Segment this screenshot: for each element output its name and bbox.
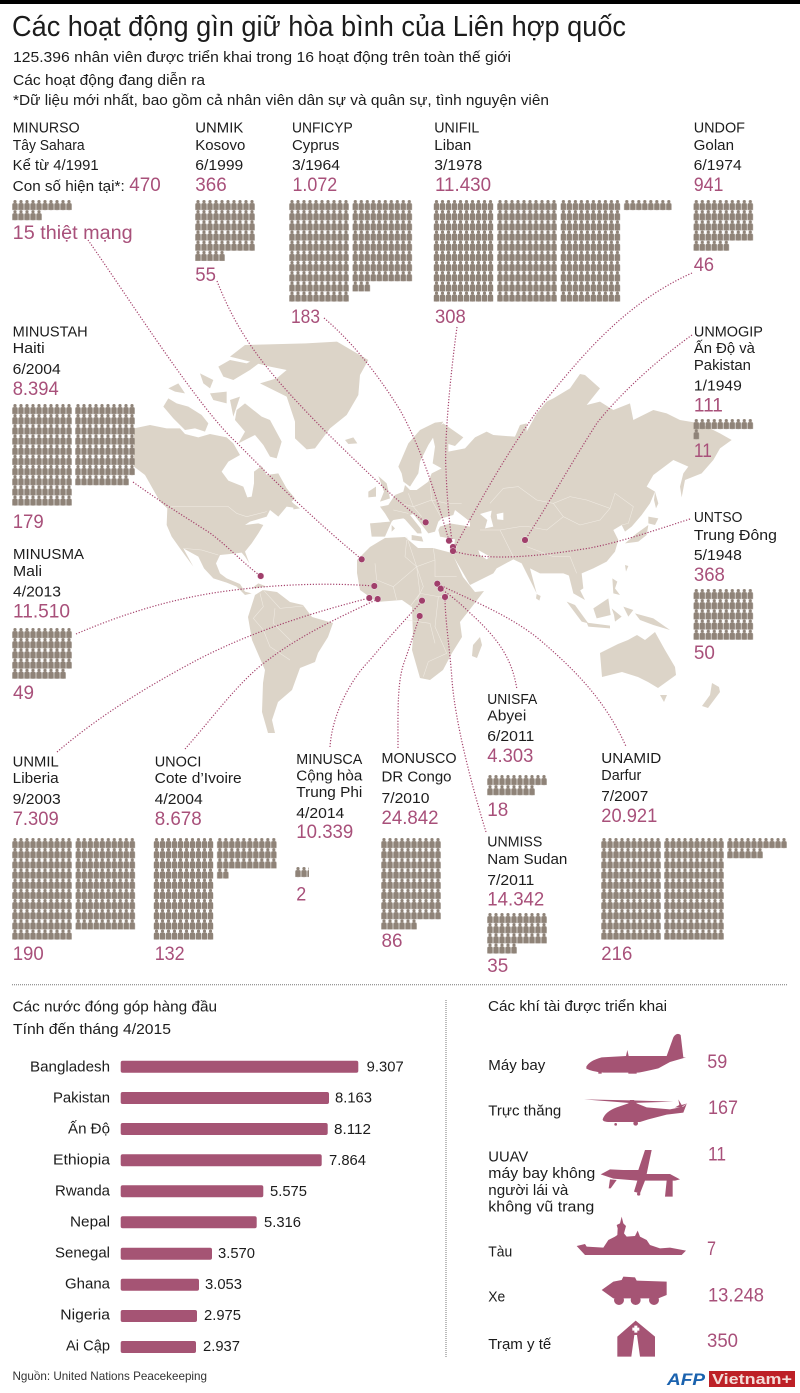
panel: MONUSCO: 7/2010 <box>382 791 430 807</box>
bar chart: 5.316 <box>264 1215 301 1231</box>
subtitle text block: 125.396 nhân viên được triển khai trong 16 hoạt động trên toàn thế giới <box>13 50 511 66</box>
panel: UNMIL: Liberia <box>13 771 60 787</box>
top black bar <box>0 0 800 4</box>
bar chart: 3.053 <box>205 1277 242 1293</box>
panel: UNTSO: 5/1948 <box>694 548 742 564</box>
panel: UNMIK: Kosovo <box>195 138 245 154</box>
source note: Nguồn: United Nations Peacekeeping <box>12 1369 207 1383</box>
panel: MINUSCA: Cộng hòa <box>296 769 363 785</box>
panel: MINUSMA: Mali <box>13 564 42 580</box>
connector lines from panels to map dots <box>57 240 692 832</box>
panel: UNOCI: Cote d’Ivoire <box>155 771 242 787</box>
panel: UNIFIL: 11.430 <box>435 175 491 196</box>
logo: Vietnam+: Vietnam+ <box>712 1371 792 1388</box>
panel: MINUSMA: MINUSMA <box>13 547 84 563</box>
panel: UNAMID: Darfur <box>601 768 641 784</box>
panel: UNOCI: UNOCI <box>155 755 201 771</box>
logo: AFP: AFP <box>666 1370 706 1389</box>
panel: UNIFIL: Liban <box>434 138 471 154</box>
panel: UNMIL: 190 <box>13 944 44 965</box>
heading: top contributors <box>12 1000 217 1038</box>
bar chart: 5.575 <box>270 1184 307 1200</box>
bar chart: 3.570 <box>218 1246 255 1262</box>
panel: UNMIL: 9/2003 <box>13 792 61 808</box>
icon: helicopter <box>584 1099 687 1126</box>
panel: MINURSO <box>12 121 161 244</box>
panel: UNTSO: UNTSO <box>694 510 742 526</box>
panel: MINUSTAH: 6/2004 <box>13 362 61 378</box>
panel: UNMISS: UNMISS <box>487 835 542 851</box>
panel: UNIFIL: UNIFIL <box>434 121 479 137</box>
panel: UNMOGIP <box>693 325 763 462</box>
bar chart: Bangladesh <box>30 1060 110 1076</box>
panel: UNOCI <box>154 755 277 965</box>
panel: UNMIK: 55 <box>195 265 216 286</box>
panel: UNAMID: 216 <box>601 944 632 965</box>
panel: MINUSMA: 49 <box>13 683 34 704</box>
icon: drone <box>601 1150 680 1197</box>
panel: UNMIK: 366 <box>195 175 227 196</box>
map location dots <box>257 519 528 619</box>
bar chart: Nigeria <box>60 1308 111 1324</box>
panel: UNMIK: UNMIK <box>195 121 244 137</box>
panel: UNFICYP: 1.072 <box>292 175 337 196</box>
panel: UNTSO: 50 <box>694 643 715 664</box>
bar chart: 2.937 <box>203 1339 240 1355</box>
panel: UNISFA: 18 <box>487 800 508 821</box>
panel: UNIFIL: 308 <box>435 307 466 328</box>
panel: UNOCI: 132 <box>155 944 185 965</box>
panel: UNMIK <box>195 121 255 286</box>
panel: UNTSO: 368 <box>694 565 725 586</box>
bar chart: 2.975 <box>204 1308 241 1324</box>
world map <box>134 342 732 733</box>
panel: MINUSCA: 10.339 <box>296 822 353 843</box>
map country borders <box>167 482 633 677</box>
panel: UNAMID: 7/2007 <box>601 789 648 805</box>
equipment counts: 350 <box>707 1331 738 1352</box>
equipment labels: máy bay không <box>488 1166 595 1182</box>
bar chart: Ethiopia <box>53 1153 111 1169</box>
icon: armored vehicle <box>602 1277 667 1305</box>
panel: MONUSCO: 86 <box>382 931 402 952</box>
equipment labels: Xe <box>488 1290 505 1306</box>
panel: UNDOF: 6/1974 <box>694 158 742 174</box>
panel: MINURSO: 15 thiệt mạng <box>13 223 133 244</box>
panel: UNTSO <box>693 510 777 664</box>
bar chart: 9.307 <box>367 1060 404 1076</box>
heading: top contributors: Tính đến tháng 4/2015 <box>13 1022 171 1038</box>
heading: top contributors: Các nước đóng góp hàng đầu <box>12 1000 217 1016</box>
icon: ship <box>577 1217 686 1255</box>
panel: UNMISS: 14.342 <box>487 890 544 911</box>
panel: UNISFA: UNISFA <box>487 692 538 708</box>
panel: UNDOF: 46 <box>694 255 714 276</box>
panel: MINURSO: 470 <box>129 175 161 196</box>
panel: UNMOGIP: Pakistan <box>694 358 751 374</box>
panel: UNMISS: Nam Sudan <box>487 852 567 868</box>
panel: UNMIK: 6/1999 <box>195 158 243 174</box>
panel: UNMOGIP: 111 <box>694 396 723 417</box>
panel: MINURSO: Tây Sahara <box>13 138 86 154</box>
panel: UNMOGIP: 1/1949 <box>694 379 742 395</box>
subtitle text block: *Dữ liệu mới nhất, bao gồm cả nhân viên dân sự và quân sự, tình nguyện viên <box>13 93 549 109</box>
panel: UNMISS: 7/2011 <box>487 873 534 889</box>
panel: UNOCI: 4/2004 <box>155 792 203 808</box>
equipment labels: Trực thăng <box>488 1104 561 1120</box>
bar chart: 8.112 <box>334 1122 371 1138</box>
panel: MONUSCO: 24.842 <box>382 808 438 829</box>
equipment labels: UUAV <box>488 1150 529 1166</box>
bar chart <box>30 1060 404 1355</box>
icon: medical tent <box>617 1321 655 1357</box>
panel: UNIFIL: 3/1978 <box>434 158 482 174</box>
equipment labels: người lái và <box>488 1183 569 1199</box>
panel: MINUSTAH: MINUSTAH <box>13 325 88 341</box>
panel: MINUSMA: 11.510 <box>13 602 70 623</box>
equipment counts: 59 <box>707 1052 727 1073</box>
panel: UNIFIL <box>434 121 672 328</box>
panel: UNDOF: Golan <box>694 138 734 154</box>
panel: UNFICYP <box>289 121 412 328</box>
bar chart: Ấn Độ <box>68 1121 110 1138</box>
panel: UNISFA <box>487 692 547 821</box>
equipment labels: Máy bay <box>488 1058 546 1074</box>
bar chart: Rwanda <box>55 1184 111 1200</box>
bar chart: 8.163 <box>335 1091 372 1107</box>
equipment labels: Trạm y tế <box>488 1337 551 1353</box>
panel: UNISFA: 6/2011 <box>487 729 534 745</box>
panel: UNFICYP: UNFICYP <box>292 121 353 137</box>
panel: UNMOGIP: Ấn Độ và <box>694 340 756 357</box>
heading: equipment: Các khí tài được triển khai <box>488 999 667 1015</box>
equipment counts <box>707 1052 764 1352</box>
panel: UNAMID: UNAMID <box>601 751 661 767</box>
panel: UNISFA: Abyei <box>487 709 526 725</box>
equipment counts: 7 <box>707 1239 716 1260</box>
panel: UNTSO: Trung Đông <box>694 528 777 544</box>
South America <box>248 590 333 733</box>
panel: UNMIL: 7.309 <box>13 809 59 830</box>
panel: MINURSO: Con số hiện tại*: <box>13 179 125 195</box>
panel: MINUSTAH: 8.394 <box>13 379 59 400</box>
equipment labels: không vũ trang <box>488 1200 594 1216</box>
panel: UNFICYP: Cyprus <box>292 138 339 154</box>
equipment counts: 167 <box>708 1098 738 1119</box>
Madagascar <box>472 637 482 658</box>
panel: MINUSTAH: 179 <box>13 512 44 533</box>
bar chart: Ghana <box>65 1277 111 1293</box>
equipment labels <box>488 1058 595 1353</box>
panel: MINUSTAH <box>12 325 135 533</box>
panel: MINUSTAH: Haiti <box>13 341 45 357</box>
subtitle text block <box>13 50 549 109</box>
panel: MINUSMA: 4/2013 <box>13 585 61 601</box>
bar chart: 7.864 <box>329 1153 366 1169</box>
subtitle text block: Các hoạt động đang diễn ra <box>13 72 206 89</box>
panel: MINUSMA <box>12 547 84 704</box>
panel: UNDOF: UNDOF <box>694 121 745 137</box>
panel: MONUSCO <box>381 751 456 952</box>
bar chart: Ai Cập <box>66 1339 110 1355</box>
bar chart: Pakistan <box>53 1091 110 1107</box>
panel: UNFICYP: 183 <box>291 307 320 328</box>
title: Các hoạt động gìn giữ hòa bình của Liên hợp quốc <box>12 11 626 43</box>
panel: MINUSCA: Trung Phi <box>296 785 362 801</box>
panel: MINURSO: MINURSO <box>13 121 80 137</box>
panel: UNISFA: 4.303 <box>487 746 533 767</box>
Australia <box>600 632 676 688</box>
New Zealand <box>702 683 720 708</box>
panel: UNMISS <box>487 835 567 977</box>
panel: UNMOGIP: UNMOGIP <box>694 325 763 341</box>
panel: UNAMID: 20.921 <box>601 806 657 827</box>
panel: MINUSCA: MINUSCA <box>296 752 363 768</box>
equipment counts: 13.248 <box>708 1286 764 1307</box>
panel: MINUSCA: 4/2014 <box>296 806 344 822</box>
panel: UNFICYP: 3/1964 <box>292 158 340 174</box>
panel: MINUSCA <box>295 752 363 906</box>
panel: MONUSCO: DR Congo <box>382 770 452 786</box>
bar chart: Senegal <box>55 1246 110 1262</box>
panel: UNAMID <box>601 751 787 965</box>
bar chart: Nepal <box>70 1215 110 1231</box>
panel: UNOCI: 8.678 <box>155 809 202 830</box>
panel: UNMISS: 35 <box>487 956 508 977</box>
equipment labels: Tàu <box>488 1245 512 1261</box>
panel: equipment deployed <box>488 999 764 1357</box>
icon: airplane <box>586 1034 686 1074</box>
panel: MINUSCA: 2 <box>296 885 306 906</box>
panel: MONUSCO: MONUSCO <box>382 751 456 767</box>
panel: UNMIL <box>12 755 135 965</box>
panel: top contributing countries <box>12 1000 404 1355</box>
panel: MINURSO: Kể từ 4/1991 <box>13 158 99 174</box>
panel: UNMOGIP: 11 <box>694 441 712 462</box>
Africa <box>357 537 484 680</box>
equipment counts: 11 <box>708 1145 726 1166</box>
panel: UNDOF <box>693 121 753 276</box>
panel: UNDOF: 941 <box>694 175 723 196</box>
panel: UNMIL: UNMIL <box>13 755 59 771</box>
